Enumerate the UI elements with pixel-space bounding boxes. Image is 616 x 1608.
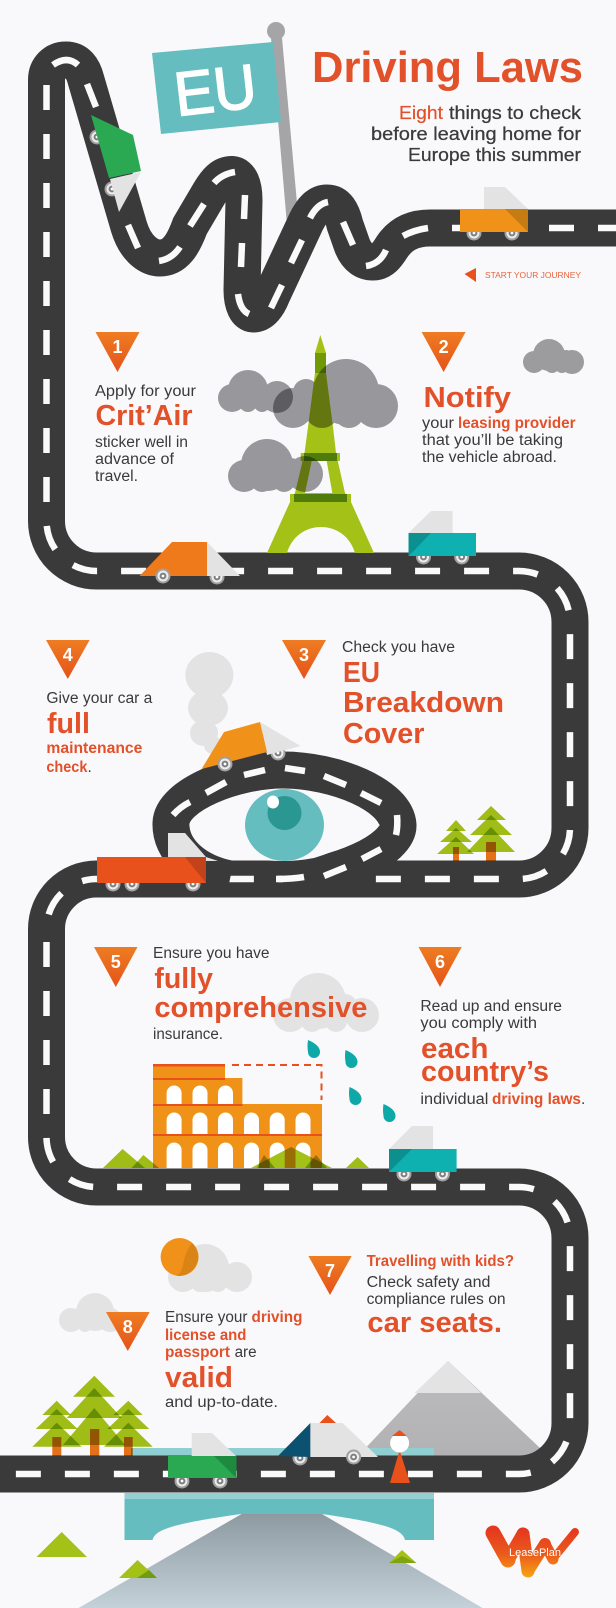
step 5 badge: 5 [111,952,121,972]
step 2 text: Notify [424,382,511,414]
step 2 text: leasing provider [458,415,576,432]
step 8 text: license and [165,1327,246,1344]
red truck [97,833,218,892]
road dashes: winding section [53,60,616,314]
step 3 badge: 3 [299,645,309,665]
eye-shaped road loop [171,770,398,879]
EU flag: EU [171,52,260,130]
step 7 badge: 7 [325,1261,335,1281]
step 5 text: insurance. [153,1026,223,1043]
large tree [467,806,515,861]
mountain [358,1361,545,1456]
step 8 text: valid [165,1362,233,1394]
road into distance [79,1514,482,1608]
step 4 text: maintenance [46,740,143,757]
small tree [437,820,474,861]
step 4 badge [46,640,90,679]
step 8 text: and up-to-date. [165,1394,278,1411]
step 1 badge [96,332,140,372]
EU flag [152,42,281,134]
road [46,60,616,521]
cloud behind sun [168,1244,252,1292]
step 4 text: Give your car a [46,690,153,707]
step 2 text: your [422,415,454,432]
step 6 text: . [581,1091,585,1108]
raindrops [308,1040,396,1122]
forest of trees [32,1376,153,1456]
Colosseum [153,1064,322,1168]
LeasePlan logo [493,1532,575,1571]
Eiffel tower [267,335,374,553]
green hill triangles [36,1532,416,1578]
eye white and iris [189,789,380,861]
title: Driving Laws [312,43,583,92]
LeasePlan logo: LeasePlan [509,1547,561,1559]
step 1 text: advance of [95,451,175,468]
lower cloud by tower [228,439,323,492]
road: lower serpentine [0,521,570,1474]
step 2 badge: 2 [439,337,449,357]
step 2 text: that you’ll be taking [422,432,563,449]
start your journey label [464,268,581,282]
broken down orange car [202,722,301,772]
step 6 text: you comply with [420,1015,537,1032]
step 2 badge [422,332,466,372]
step 7 text: Check safety and [367,1274,490,1291]
step 3 text: EU [343,657,380,689]
green hills at Colosseum [103,1147,369,1168]
orange car [140,542,240,584]
subtitle: Europe this summer [408,145,581,165]
step 6 text: driving laws [492,1091,581,1108]
step 3 text: Check you have [342,639,455,656]
start your journey label: START YOUR JOURNEY [485,270,581,280]
yellow car [460,187,528,240]
sun [161,1238,199,1276]
step 1 text: Apply for your [95,383,196,400]
cloud behind step 5 [273,973,379,1032]
eye loop dashes [173,768,397,879]
step 3 text: Breakdown [343,687,504,719]
step 4 text: . [88,759,92,776]
step 4 text [46,690,153,776]
step 6 text: country’s [421,1056,549,1088]
subtitle: things to check [449,103,582,123]
step 7 text: car seats. [367,1307,502,1339]
road dashes: lower serpentine [0,85,570,1474]
step 5 text: Ensure you have [153,945,270,962]
flag pole [267,22,299,225]
cloud over tower [273,359,398,428]
small cloud left [59,1293,122,1332]
subtitle [371,103,582,165]
step 6 text [420,998,585,1108]
step 8 text [165,1309,302,1411]
step 3 text: Cover [343,718,424,750]
step 6 text: each [421,1033,488,1065]
step 8 text: driving [252,1309,302,1326]
step 5 text: fully [154,963,213,995]
exhaust smoke [185,652,233,754]
step 1 text: Crit’Air [96,400,192,432]
bridge [124,1448,434,1540]
cloud left of tower [218,370,293,413]
step 6 badge: 6 [435,952,445,972]
step 4 badge: 4 [63,645,73,665]
cloud top right [523,339,584,374]
step 1 badge: 1 [112,337,123,357]
step 6 text: individual [420,1091,488,1108]
step 5 text: comprehensive [154,992,367,1024]
step 6 badge [418,947,462,987]
step 7 text: Travelling with kids? [367,1253,514,1270]
step 6 text: Read up and ensure [420,998,562,1015]
step 2 text [422,382,576,466]
step 5 badge [94,947,138,987]
grey car with dark windscreen [278,1415,378,1466]
step 8 text: Ensure your [165,1309,248,1326]
step 3 badge [282,640,326,679]
subtitle: before leaving home for [371,124,581,144]
step 1 text: travel. [95,468,138,485]
step 1 text: sticker well in [95,434,188,451]
green car on winding road [90,115,141,212]
step 7 text [367,1253,514,1339]
teal car [409,511,476,564]
step 8 badge [106,1312,150,1351]
step 4 text: check [46,759,88,776]
step 1 text [95,383,196,485]
traffic figure [390,1430,410,1483]
teal car lower [389,1126,457,1182]
step 8 text: passport [165,1344,230,1361]
step 2 text: the vehicle abroad. [422,449,557,466]
step 4 text: full [47,708,90,740]
step 8 badge: 8 [123,1317,133,1337]
green truck [168,1433,236,1488]
step 7 badge [308,1256,352,1295]
step 5 text [153,945,367,1043]
step 8 text: are [235,1344,257,1361]
step 7 text: compliance rules on [367,1291,506,1308]
step 3 text [342,639,504,750]
subtitle: Eight [399,103,443,123]
